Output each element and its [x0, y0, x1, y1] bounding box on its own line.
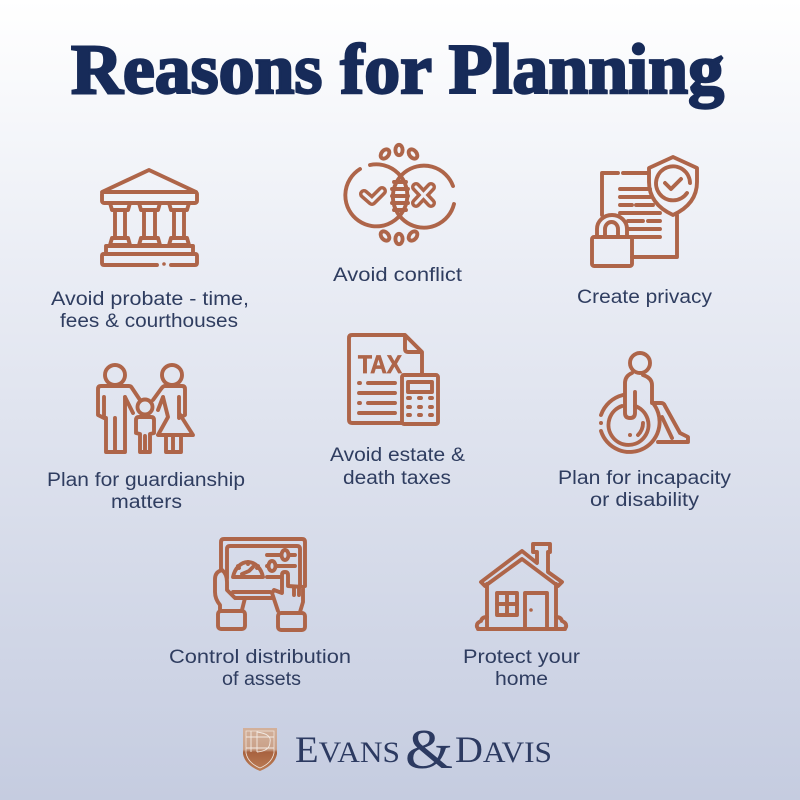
label: guardianship: Plan for guardianship [47, 470, 245, 491]
label: avoid probate [51, 289, 249, 332]
label: guardianship [47, 470, 245, 513]
label: guardianship: matters [111, 492, 182, 513]
panel: incapacity [558, 353, 732, 511]
label: avoid probate: fees & courthouses [60, 311, 238, 332]
icon: hands on tablet [215, 539, 305, 630]
panel: avoid conflict [333, 145, 463, 286]
wordmark: EVANS [295, 730, 400, 771]
wordmark: DAVIS [455, 730, 552, 771]
icon: overlapping circles [345, 145, 454, 244]
wordmark [295, 719, 552, 781]
icon: tax form and calculator [349, 335, 438, 424]
label: estate taxes: death taxes [343, 468, 451, 489]
icon: family [98, 365, 193, 452]
logo: Evans & Davis [243, 719, 552, 781]
icon: wheelchair [599, 353, 688, 452]
label: avoid conflict: Avoid conflict [333, 265, 463, 286]
label: incapacity [558, 468, 732, 511]
icon: house [477, 544, 566, 629]
panel: estate taxes [330, 335, 465, 489]
title: Reasons for Planning [71, 31, 724, 109]
icon: courthouse [102, 170, 197, 266]
label: protect home: Protect your [463, 647, 581, 668]
label: protect home [463, 647, 581, 690]
wordmark: & [405, 719, 453, 781]
label: incapacity: or disability [590, 490, 700, 511]
icon: shield crest [243, 728, 277, 771]
label: estate taxes: Avoid estate & [330, 445, 465, 466]
icon text: TAX: TAX [358, 351, 402, 379]
panel: create privacy [577, 157, 713, 308]
panel: control distribution [169, 539, 351, 690]
panel: avoid probate [51, 170, 249, 332]
label: create privacy: Create privacy [577, 287, 713, 308]
icon: document, shield and lock [592, 157, 697, 266]
panel: guardianship [47, 365, 245, 513]
label: incapacity: Plan for incapacity [558, 468, 732, 489]
label: control distribution: Control distribution [169, 647, 351, 668]
label: estate taxes [330, 445, 465, 489]
label: control distribution [169, 647, 351, 690]
label: protect home: home [495, 669, 548, 690]
panel: protect home [463, 544, 581, 690]
label: avoid probate: Avoid probate - time, [51, 289, 249, 310]
label: control distribution: of assets [222, 669, 301, 690]
